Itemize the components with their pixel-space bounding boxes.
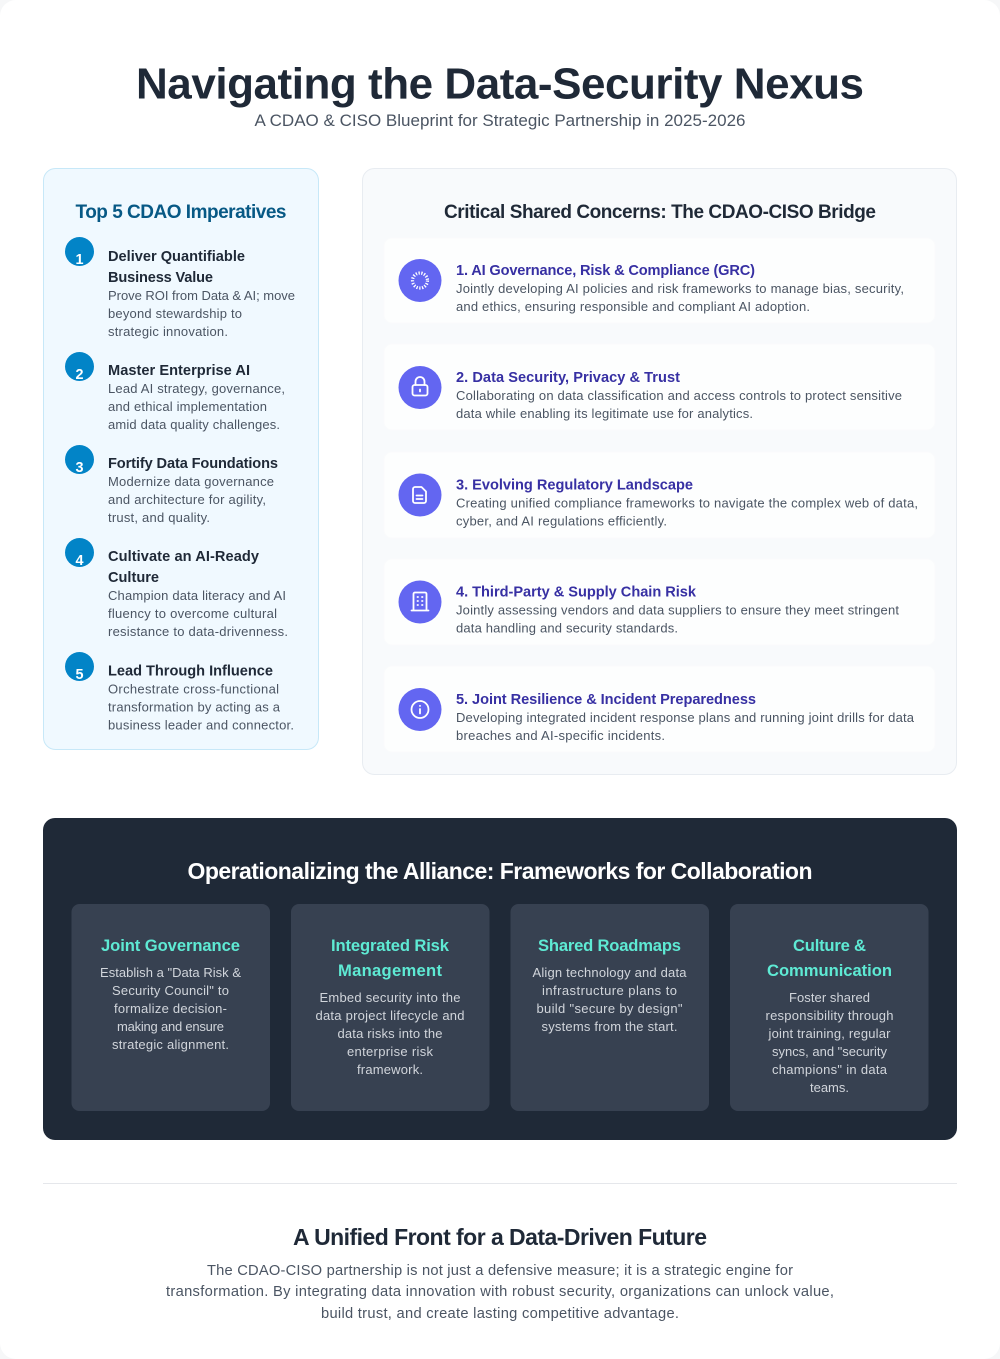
- concern 3: cyber, and AI regulations efficiently.: [456, 514, 667, 528]
- framework card: shared roadmaps: build "secure by design": [536, 1001, 683, 1016]
- framework card: joint governance: Security Council" to: [112, 983, 229, 998]
- imperative 4: fluency to overcome cultural: [108, 606, 277, 621]
- imperative 4: Champion data literacy and AI: [108, 588, 286, 603]
- framework card: shared roadmaps: Align technology and data: [532, 965, 687, 980]
- icon: padlock: [412, 377, 428, 396]
- imperative 1: beyond stewardship to: [108, 306, 242, 321]
- framework card: integrated risk management: enterprise risk: [347, 1044, 434, 1059]
- framework card: integrated risk management: data risks into the: [338, 1026, 442, 1041]
- heading: top 5 CDAO imperatives: Top 5 CDAO Imperatives: [76, 202, 286, 223]
- concern 1: Jointly developing AI policies and risk frameworks to manage bias, security,: [456, 281, 904, 296]
- imperative 1: [65, 237, 295, 339]
- framework card: joint governance: Establish a "Data Risk &: [100, 965, 241, 980]
- framework card: integrated risk management: Integrated Risk: [331, 936, 450, 955]
- imperative 3: trust, and quality.: [108, 510, 210, 525]
- concern 5: [384, 666, 935, 752]
- imperative 1: strategic innovation.: [108, 324, 228, 339]
- concern 5: 5. Joint Resilience & Incident Preparedness: [456, 692, 756, 708]
- framework card: culture and communication: teams.: [810, 1080, 849, 1095]
- framework card: integrated risk management: Embed security into the: [320, 990, 460, 1005]
- framework card: integrated risk management: [291, 904, 490, 1111]
- imperative 5: Orchestrate cross-functional: [108, 682, 279, 696]
- concern 5: Developing integrated incident response plans and running joint drills for data: [456, 710, 915, 725]
- concern 5: breaches and AI-specific incidents.: [456, 728, 665, 743]
- imperative 5: [65, 652, 294, 732]
- imperative 3: Modernize data governance: [108, 474, 274, 489]
- imperative 1: Prove ROI from Data & AI; move: [108, 288, 295, 303]
- framework card: shared roadmaps: Shared Roadmaps: [538, 936, 681, 955]
- concern 4: [384, 559, 935, 645]
- concern 2: data while enabling its legitimate use for analytics.: [456, 406, 753, 421]
- framework card: integrated risk management: Management: [338, 961, 442, 980]
- concern 4: data handling and security standards.: [456, 620, 678, 636]
- concern 1: and ethics, ensuring responsible and compliant AI adoption.: [456, 299, 810, 314]
- imperative 3: 3: [75, 460, 84, 476]
- framework card: joint governance: [72, 904, 270, 1111]
- heading: critical shared concerns: Critical Shared Concerns: The CDAO-CISO Bridge: [444, 202, 876, 223]
- imperative 3: Fortify Data Foundations: [108, 456, 278, 472]
- imperative 4: Cultivate an AI-Ready: [108, 549, 260, 565]
- imperative 1: Deliver Quantifiable: [108, 249, 245, 265]
- framework card: culture and communication: responsibility through: [766, 1008, 894, 1023]
- framework card: shared roadmaps: systems from the start.: [542, 1019, 678, 1034]
- imperative 4: 4: [75, 553, 84, 569]
- framework card: culture and communication: [730, 904, 928, 1111]
- framework card: integrated risk management: data project lifecycle and: [316, 1008, 464, 1023]
- imperative 3: [65, 445, 278, 525]
- imperative 1: 1: [75, 252, 84, 268]
- framework card: culture and communication: Foster shared: [789, 990, 870, 1005]
- imperative 2: 2: [75, 367, 84, 383]
- imperative 5: 5: [75, 667, 84, 683]
- concern 3: [384, 452, 935, 538]
- framework card: culture and communication: joint training, regular: [768, 1026, 891, 1041]
- concern 2: 2. Data Security, Privacy & Trust: [456, 370, 680, 386]
- closing heading: A Unified Front for a Data-Driven Future: [293, 1224, 707, 1250]
- imperative 2: and ethical implementation: [108, 399, 267, 414]
- icon: office building: [412, 592, 428, 610]
- framework card: joint governance: Joint Governance: [101, 936, 240, 955]
- concern 3: 3. Evolving Regulatory Landscape: [456, 478, 693, 494]
- concern 4: 4. Third-Party & Supply Chain Risk: [456, 584, 697, 600]
- subtitle: A CDAO & CISO Blueprint for Strategic Partnership in 2025-2026: [254, 111, 746, 130]
- imperative 2: amid data quality challenges.: [108, 417, 280, 432]
- concern 2: [384, 344, 935, 430]
- imperative 2: [65, 352, 285, 432]
- imperative 4: [65, 538, 288, 639]
- framework card: joint governance: formalize decision-: [114, 1001, 227, 1016]
- concern 1: 1. AI Governance, Risk & Compliance (GRC): [456, 263, 755, 279]
- framework card: culture and communication: syncs, and "security: [772, 1044, 888, 1059]
- icon: document: [413, 487, 426, 503]
- imperative 5: transformation by acting as a: [108, 700, 281, 714]
- concern 1: [384, 238, 935, 323]
- imperative 5: business leader and connector.: [108, 718, 294, 732]
- imperative 2: Master Enterprise AI: [108, 363, 250, 379]
- icon: loading spinner: [412, 273, 428, 288]
- framework card: joint governance: making and ensure: [117, 1019, 224, 1034]
- panel: critical shared concerns: [362, 168, 956, 774]
- closing paragraph: build trust, and create lasting competitive advantage.: [321, 1306, 679, 1322]
- panel: operationalizing the alliance: [43, 818, 957, 1140]
- title: Navigating the Data-Security Nexus: [136, 60, 864, 108]
- closing paragraph: [166, 1263, 834, 1322]
- panel: top 5 CDAO imperatives: [44, 168, 318, 750]
- icon: info: [412, 701, 428, 718]
- imperative 5: Lead Through Influence: [108, 664, 273, 680]
- concern 4: Jointly assessing vendors and data suppliers to ensure they meet stringent: [456, 602, 899, 618]
- imperative 3: and architecture for agility,: [108, 492, 266, 507]
- heading: operationalizing the alliance: Operationalizing the Alliance: Frameworks for Collaboration: [188, 858, 812, 884]
- imperative 4: resistance to data-drivenness.: [108, 624, 288, 639]
- concern 2: Collaborating on data classification and access controls to protect sensitive: [456, 388, 902, 403]
- closing paragraph: transformation. By integrating data innovation with robust security, organizations can unlock value,: [166, 1284, 834, 1300]
- concern 3: Creating unified compliance frameworks to navigate the complex web of data,: [456, 496, 918, 510]
- framework card: shared roadmaps: [510, 904, 709, 1111]
- imperative 1: Business Value: [108, 270, 213, 286]
- imperative 2: Lead AI strategy, governance,: [108, 381, 285, 396]
- framework card: shared roadmaps: infrastructure plans to: [542, 983, 677, 998]
- framework card: culture and communication: Culture &: [793, 936, 866, 955]
- framework card: culture and communication: champions" in data: [772, 1062, 888, 1077]
- framework card: culture and communication: Communication: [767, 961, 892, 980]
- framework card: joint governance: strategic alignment.: [112, 1037, 229, 1052]
- imperative 4: Culture: [108, 570, 159, 586]
- framework card: integrated risk management: framework.: [357, 1062, 423, 1077]
- closing paragraph: The CDAO-CISO partnership is not just a defensive measure; it is a strategic engine for: [207, 1263, 793, 1279]
